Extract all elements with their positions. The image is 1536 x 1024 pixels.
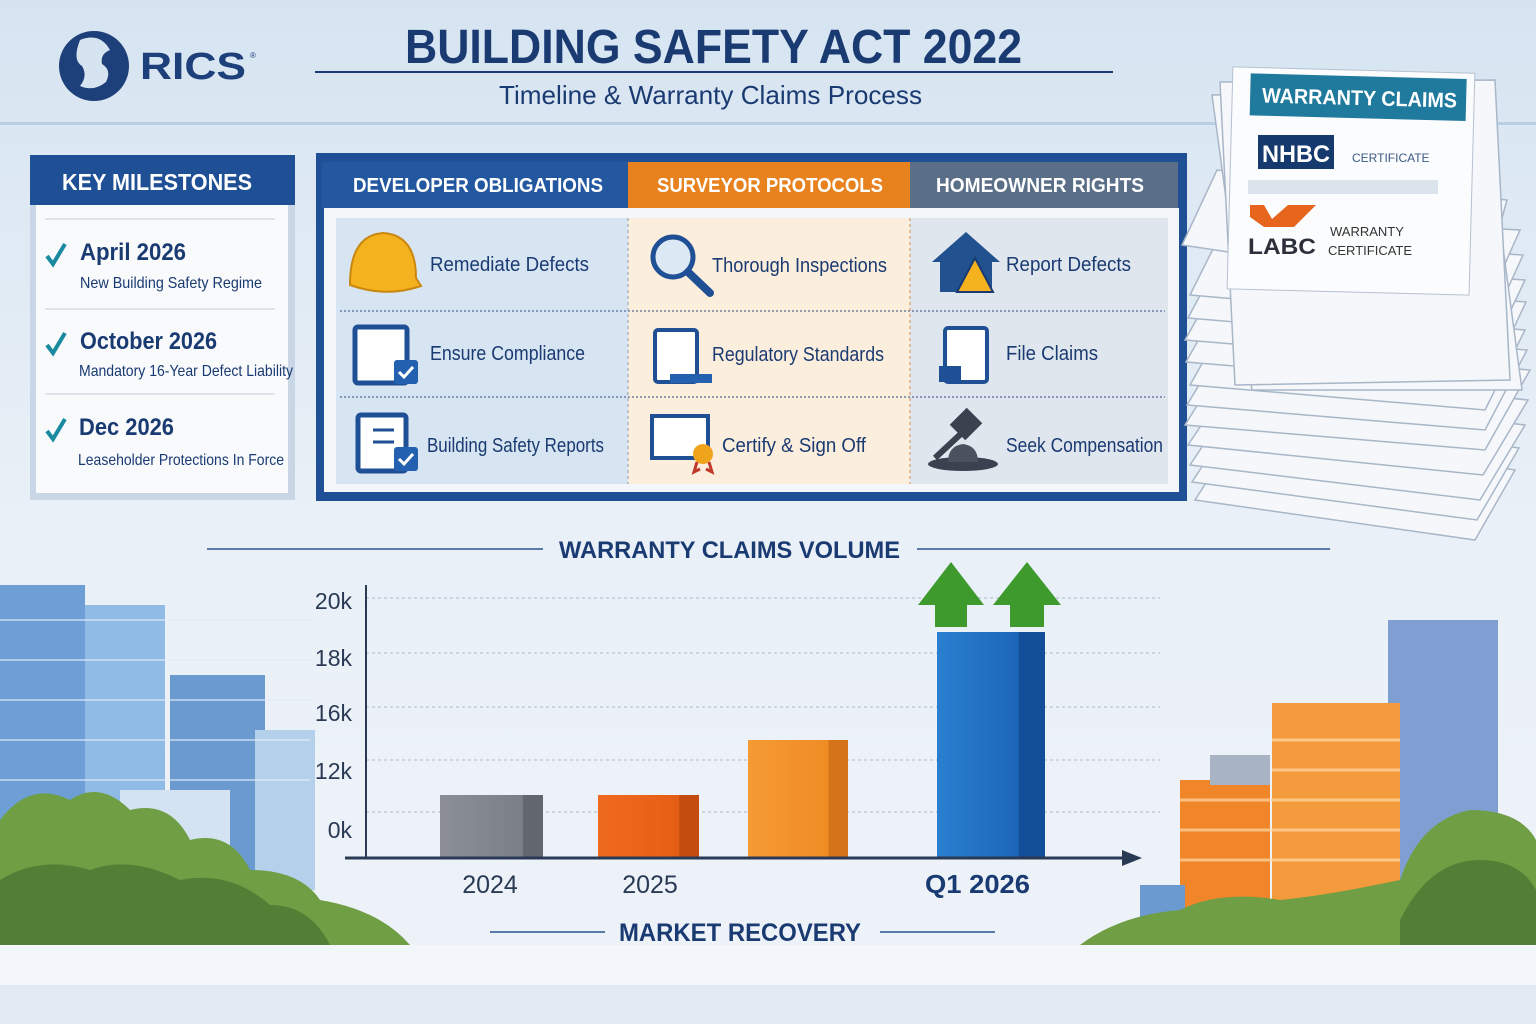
title: BUILDING SAFETY ACT 2022	[405, 21, 1022, 74]
header: surveyor	[628, 162, 910, 208]
y axis labels: 18k	[315, 645, 352, 671]
chart: warranty claims volume: WARRANTY CLAIMS VOLUME	[559, 537, 900, 564]
item: regulatory standards	[655, 330, 884, 383]
paper stack: warranty claims: WARRANTY CLAIMS	[1262, 84, 1457, 113]
title: Timeline & Warranty Claims Process	[499, 80, 922, 110]
paper stack: warranty claims: CERTIFICATE	[1328, 243, 1412, 258]
title	[315, 21, 1113, 110]
bars	[440, 795, 543, 858]
milestone: October 2026: Mandatory 16-Year Defect Liability	[79, 363, 293, 380]
panel: key milestones: KEY MILESTONES	[62, 169, 252, 195]
item: remediate defects	[350, 233, 589, 292]
panel: obligations grid	[316, 153, 1187, 501]
item: remediate defects: Remediate Defects	[430, 254, 589, 276]
item: thorough inspections	[653, 237, 887, 293]
icon: growth arrows	[918, 562, 1061, 627]
paper stack: warranty claims: CERTIFICATE	[1352, 151, 1430, 165]
milestone: April 2026	[47, 239, 262, 292]
logo: RICS: RICS	[140, 46, 246, 88]
milestone: Dec 2026: Dec 2026	[79, 414, 174, 441]
header: surveyor: SURVEYOR PROTOCOLS	[657, 175, 883, 197]
item: regulatory standards: Regulatory Standards	[712, 344, 884, 366]
item: file claims: File Claims	[1006, 343, 1098, 365]
item: certify & sign off: Certify & Sign Off	[722, 435, 866, 457]
chart: warranty claims volume	[207, 537, 1330, 899]
paper stack: warranty claims: LABC	[1248, 234, 1316, 259]
header: developer	[322, 162, 628, 208]
item: ensure compliance	[355, 327, 585, 384]
y axis labels: 0k	[328, 817, 352, 843]
item: report defects: Report Defects	[1006, 254, 1131, 276]
item: file claims	[939, 328, 1098, 382]
x labels: 2024	[462, 871, 518, 899]
item: seek compensation	[928, 408, 1163, 471]
logo: RICS	[59, 31, 256, 101]
milestone: Dec 2026	[47, 414, 284, 469]
item: seek compensation: Seek Compensation	[1006, 435, 1163, 457]
header: developer: DEVELOPER OBLIGATIONS	[353, 175, 603, 197]
footer label: market recovery: MARKET RECOVERY	[619, 919, 861, 947]
chart: warranty claims volume: 2025	[622, 871, 678, 899]
milestone: Dec 2026: Leaseholder Protections In Force	[78, 452, 284, 469]
milestone: October 2026: October 2026	[80, 328, 217, 355]
item: report defects	[932, 232, 1131, 292]
item: building safety reports: Building Safety Reports	[427, 435, 604, 457]
chart: warranty claims volume: Q1 2026	[925, 869, 1030, 899]
item: thorough inspections: Thorough Inspections	[712, 255, 887, 277]
paper stack: warranty claims: WARRANTY	[1330, 224, 1404, 239]
logo: RICS: ®	[250, 51, 256, 60]
y axis labels	[315, 588, 352, 843]
milestone: April 2026: New Building Safety Regime	[80, 275, 262, 292]
y axis labels: 12k	[315, 758, 352, 784]
item: certify & sign off	[652, 416, 866, 472]
milestone: April 2026: April 2026	[80, 239, 186, 266]
header: homeowner	[910, 162, 1178, 208]
paper stack: warranty claims	[1182, 67, 1530, 540]
y axis labels: 20k	[315, 588, 352, 614]
item: building safety reports	[358, 415, 604, 471]
header: homeowner: HOMEOWNER RIGHTS	[936, 175, 1144, 197]
cityscape left	[0, 585, 410, 945]
paper stack: warranty claims: NHBC	[1262, 141, 1330, 168]
panel: key milestones	[30, 155, 295, 500]
item: ensure compliance: Ensure Compliance	[430, 343, 585, 365]
cityscape right	[1080, 620, 1536, 945]
y axis labels: 16k	[315, 700, 352, 726]
milestone: October 2026	[47, 328, 293, 380]
